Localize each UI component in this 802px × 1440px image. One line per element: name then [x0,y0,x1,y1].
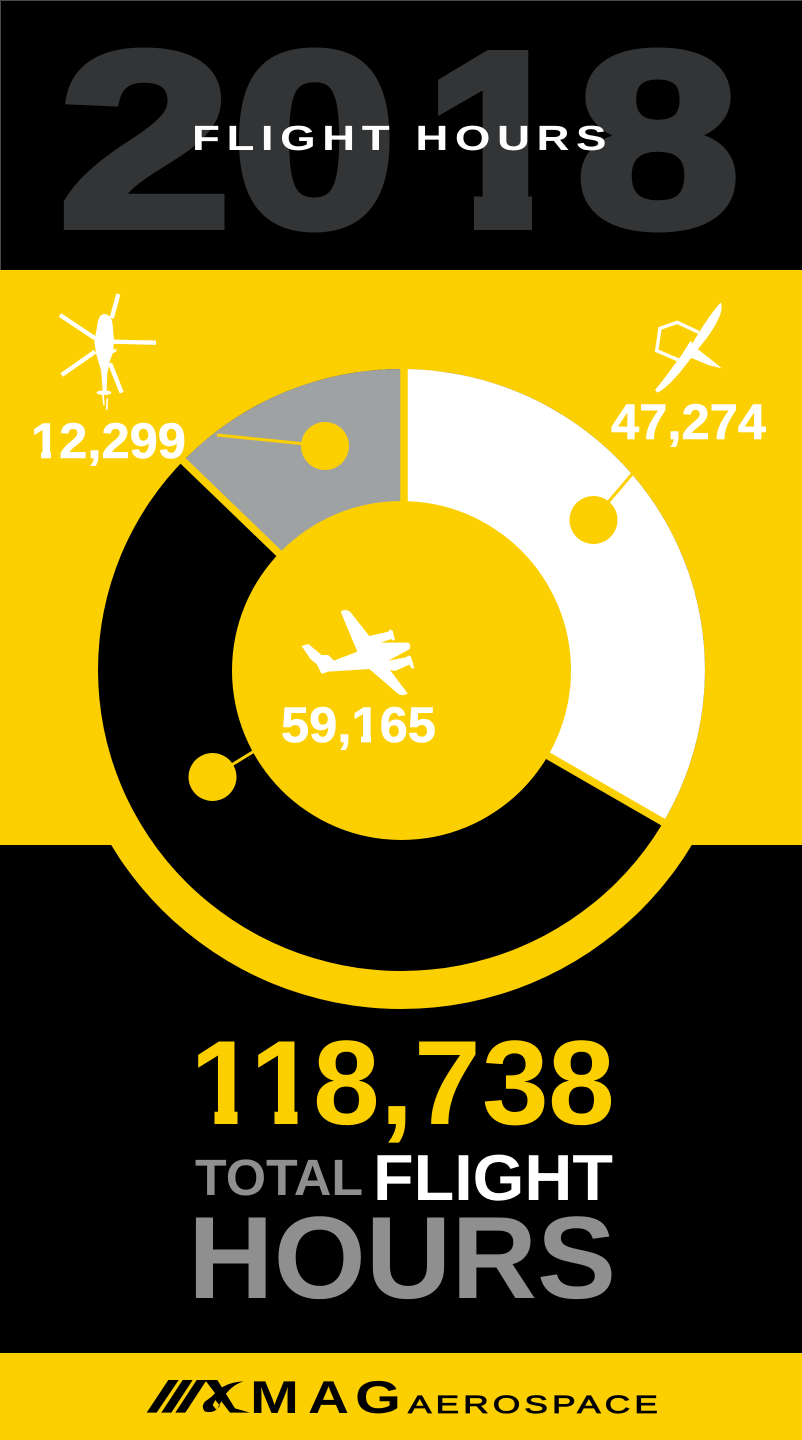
logo text: AEROSPACE: AEROSPACE [408,1391,662,1419]
segment: gray 12,299 [183,369,402,670]
label: helicopter hours: 12,299 [31,413,186,469]
icon: helicopter [60,294,156,410]
label: flight: FLIGHT [373,1141,613,1214]
footer band [0,1353,802,1440]
logo mark [147,1380,250,1413]
segment gaps [178,360,668,825]
marker: white segment [570,473,633,544]
heading: 2018: 8 [576,0,740,279]
heading: 2018: 1 [424,0,574,279]
heading: 2018 [58,0,740,279]
donut centre [232,501,571,840]
band: yellow middle panel [0,270,802,845]
donut chart [62,331,740,1009]
logo text: MAG: A [308,1371,349,1423]
heading: flight hours: FLIGHT HOURS [192,119,613,158]
icon: twin-engine plane [302,610,414,695]
segment: black 59,165 [98,369,705,971]
segment: white 47,274 [402,369,705,820]
heading: 2018: 2 [58,0,232,279]
heading: 2018: 0 [232,0,397,279]
icon: glider [655,303,722,393]
marker: black segment [188,750,256,801]
logo: MAG Aerospace [147,1371,662,1423]
label: plane hours: 59,165 [281,697,436,753]
logo text: MAG: G [355,1371,401,1423]
marker: gray segment [217,422,349,470]
label: hours: HOURS [188,1192,616,1323]
total figure: 118,738 [190,1016,615,1150]
logo text: MAG: M [250,1371,299,1423]
donut outer yellow ring [62,331,740,1009]
label: total: TOTAL [195,1149,363,1206]
label: glider hours: 47,274 [611,394,766,450]
logo text: MAG [250,1371,401,1423]
header: year and title [58,0,740,279]
